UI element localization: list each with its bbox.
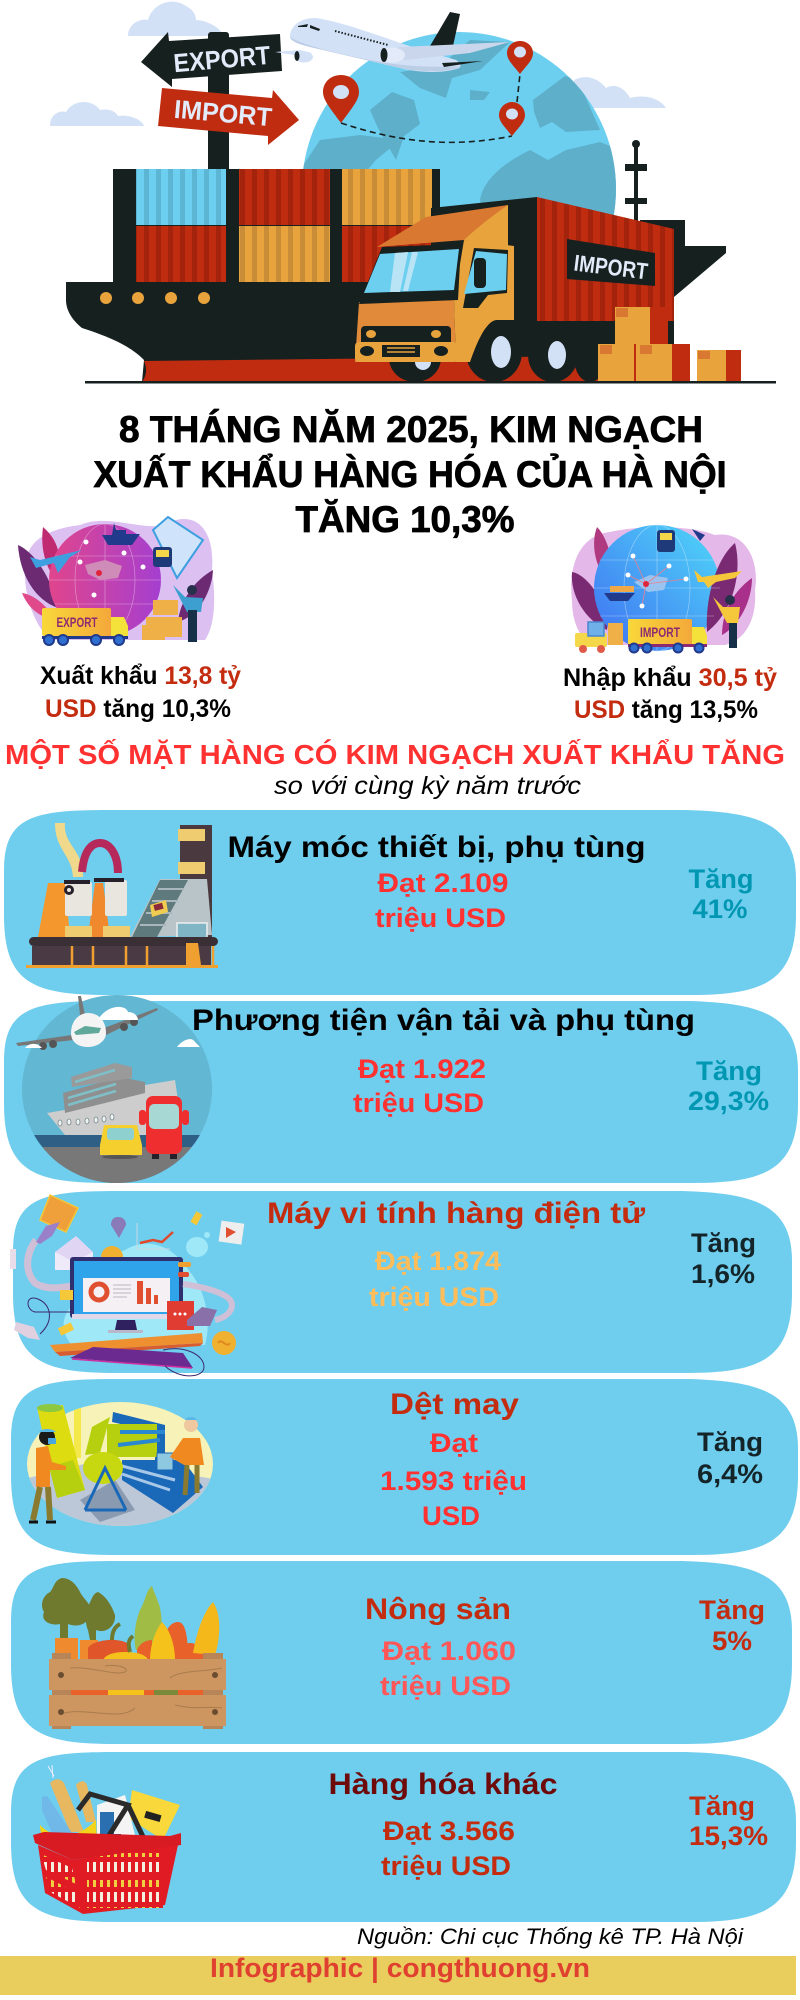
- computers text: Tăng: [691, 1228, 756, 1258]
- machinery text: [228, 831, 754, 933]
- panel: computers and electronics: [10, 1191, 792, 1376]
- textiles text: USD: [422, 1501, 480, 1531]
- export stat: Xuất khẩu 13,8 tỷ: [40, 662, 241, 690]
- ground line: [85, 381, 776, 384]
- agricultural text: Nông sản: [365, 1593, 511, 1626]
- other goods text: Hàng hóa khác: [328, 1768, 558, 1801]
- footer bar: [0, 1953, 796, 1995]
- machinery text: Đạt 2.109: [378, 868, 508, 898]
- portholes: [100, 292, 210, 304]
- hull red waterline: [142, 356, 600, 382]
- title: TĂNG 10,3%: [296, 499, 514, 540]
- ship hull: [66, 169, 726, 382]
- title: XUẤT KHẨU HÀNG HÓA CỦA HÀ NỘI: [94, 453, 726, 495]
- import stat: Nhập khẩu 30,5 tỷ: [563, 664, 777, 692]
- import arrow sign: [158, 88, 299, 145]
- icon: plane, ship and vehicles: [16, 995, 220, 1187]
- textiles text: Dệt may: [390, 1388, 519, 1421]
- import arrow sign: IMPORT: [173, 94, 273, 132]
- export arrow sign: [141, 32, 282, 87]
- transport text: 29,3%: [688, 1086, 769, 1116]
- import stat: USD tăng 13,5%: [574, 696, 758, 724]
- machinery text: Tăng: [688, 864, 754, 894]
- export stat: [40, 662, 241, 723]
- textiles text: [380, 1388, 763, 1531]
- panel: other goods: [11, 1752, 796, 1922]
- agricultural text: Tăng: [699, 1595, 765, 1625]
- footer bar: Infographic | congthuong.vn: [210, 1953, 590, 1983]
- textiles text: 1.593 triệu: [380, 1466, 527, 1496]
- icon: computer and digital objects: [10, 1195, 244, 1376]
- other goods text: triệu USD: [381, 1851, 511, 1881]
- other goods text: Tăng: [689, 1791, 755, 1821]
- transport text: triệu USD: [353, 1088, 484, 1118]
- transport text: Đạt 1.922: [358, 1054, 486, 1084]
- panel: machinery: [4, 810, 796, 995]
- title: 8 THÁNG NĂM 2025, KIM NGẠCH: [119, 409, 703, 450]
- agricultural text: [365, 1593, 765, 1701]
- truck: [355, 197, 674, 382]
- globe: [303, 32, 616, 215]
- export arrow sign: EXPORT: [172, 40, 272, 78]
- cloud top: [128, 2, 223, 36]
- sign post: [208, 32, 229, 172]
- computers text: [267, 1197, 756, 1312]
- other goods text: Đạt 3.566: [383, 1816, 515, 1846]
- textiles text: Tăng: [697, 1427, 763, 1457]
- export illustration: [18, 517, 214, 645]
- import illustration: [571, 525, 756, 653]
- textiles text: Đạt: [430, 1428, 478, 1458]
- export illustration: EXPORT: [56, 614, 98, 630]
- source note: Nguồn: Chi cục Thống kê TP. Hà Nội: [357, 1924, 744, 1949]
- containers: [136, 169, 432, 282]
- transport text: [192, 1004, 769, 1118]
- import illustration: IMPORT: [640, 624, 680, 640]
- location pin left: [323, 75, 359, 123]
- icon: factory machine: [26, 823, 218, 968]
- hero illustration: ship, truck, globe: [50, 2, 776, 383]
- panel: agricultural products: [11, 1561, 792, 1744]
- computers text: Đạt 1.874: [375, 1246, 501, 1276]
- import stat: [563, 664, 777, 724]
- panel: textiles: [11, 1379, 798, 1555]
- location pin top: [507, 41, 533, 74]
- machinery text: triệu USD: [375, 903, 506, 933]
- panel: transport: [4, 995, 798, 1187]
- textiles text: 6,4%: [697, 1459, 763, 1489]
- ship mast: [625, 140, 647, 222]
- location pin bottom: [499, 102, 525, 136]
- section subheading: so với cùng kỳ năm trước: [274, 772, 582, 800]
- agricultural text: triệu USD: [380, 1671, 511, 1701]
- agricultural text: Đạt 1.060: [382, 1636, 516, 1666]
- icon: textile machine and workers: [20, 1402, 220, 1530]
- section heading: MỘT SỐ MẶT HÀNG CÓ KIM NGẠCH XUẤT KHẨU TĂNG: [5, 738, 785, 770]
- cloud right: [574, 77, 666, 108]
- title: [94, 409, 726, 540]
- other goods text: 15,3%: [689, 1821, 768, 1851]
- computers text: triệu USD: [369, 1282, 499, 1312]
- route dashes: [341, 74, 520, 142]
- computers text: Máy vi tính hàng điện tử: [267, 1197, 645, 1230]
- cardboard boxes: [598, 307, 741, 382]
- agricultural text: 5%: [712, 1626, 752, 1656]
- other goods text: [328, 1768, 768, 1881]
- cloud left: [50, 102, 144, 126]
- computers text: 1,6%: [691, 1259, 755, 1289]
- machinery text: 41%: [692, 894, 748, 924]
- machinery text: Máy móc thiết bị, phụ tùng: [228, 831, 646, 864]
- transport text: Phương tiện vận tải và phụ tùng: [192, 1004, 695, 1037]
- icon: vegetable crate: [42, 1578, 226, 1729]
- transport text: Tăng: [696, 1056, 762, 1086]
- airplane: [275, 12, 510, 72]
- export stat: USD tăng 10,3%: [45, 695, 231, 723]
- icon: shopping basket: [33, 1765, 181, 1914]
- truck: IMPORT: [573, 250, 649, 284]
